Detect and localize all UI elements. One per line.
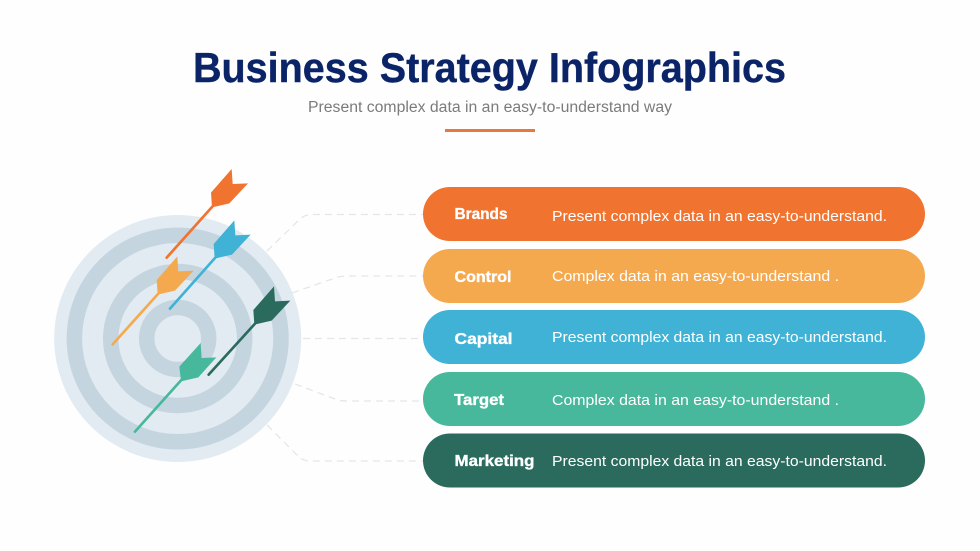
bar: Brands: Brands xyxy=(454,206,508,223)
dart: teal xyxy=(135,343,216,432)
dart: dark green xyxy=(209,286,290,375)
bar: Control xyxy=(423,249,925,303)
bar: Marketing: Present complex data in an easy-to-understand. xyxy=(552,453,887,470)
bar: Target xyxy=(423,372,925,426)
bar: Marketing: Marketing xyxy=(454,453,534,470)
bar: Capital: Present complex data in an easy-to-understand. xyxy=(552,329,887,346)
dart: blue xyxy=(170,220,251,309)
bar: Brands xyxy=(423,187,925,241)
bar: Control: Control xyxy=(454,269,512,286)
bar: Control: Complex data in an easy-to-understand . xyxy=(552,268,839,285)
bar: Target: Complex data in an easy-to-understand . xyxy=(552,392,839,409)
bar: Marketing xyxy=(423,434,925,488)
subtitle: Present complex data in an easy-to-understand way xyxy=(308,99,672,116)
bar: Brands: Present complex data in an easy-to-understand. xyxy=(552,208,887,225)
bar: Capital xyxy=(423,310,925,364)
dart: orange xyxy=(167,169,248,258)
bar: Capital: Capital xyxy=(454,331,512,348)
title: Business Strategy Infographics xyxy=(193,44,786,91)
connector lines xyxy=(267,214,423,461)
title underline xyxy=(445,129,535,132)
target board xyxy=(54,215,301,462)
bar: Target: Target xyxy=(454,392,505,409)
dart: light orange xyxy=(113,256,194,344)
